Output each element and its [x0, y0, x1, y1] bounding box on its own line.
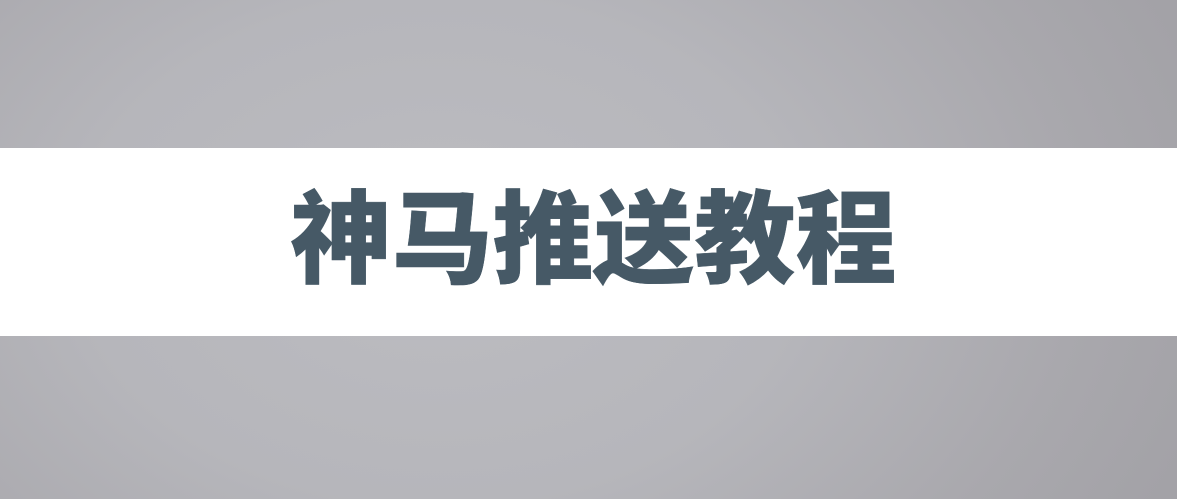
- panel: white title band: [0, 148, 1177, 336]
- title: 神马推送教程: [290, 185, 896, 297]
